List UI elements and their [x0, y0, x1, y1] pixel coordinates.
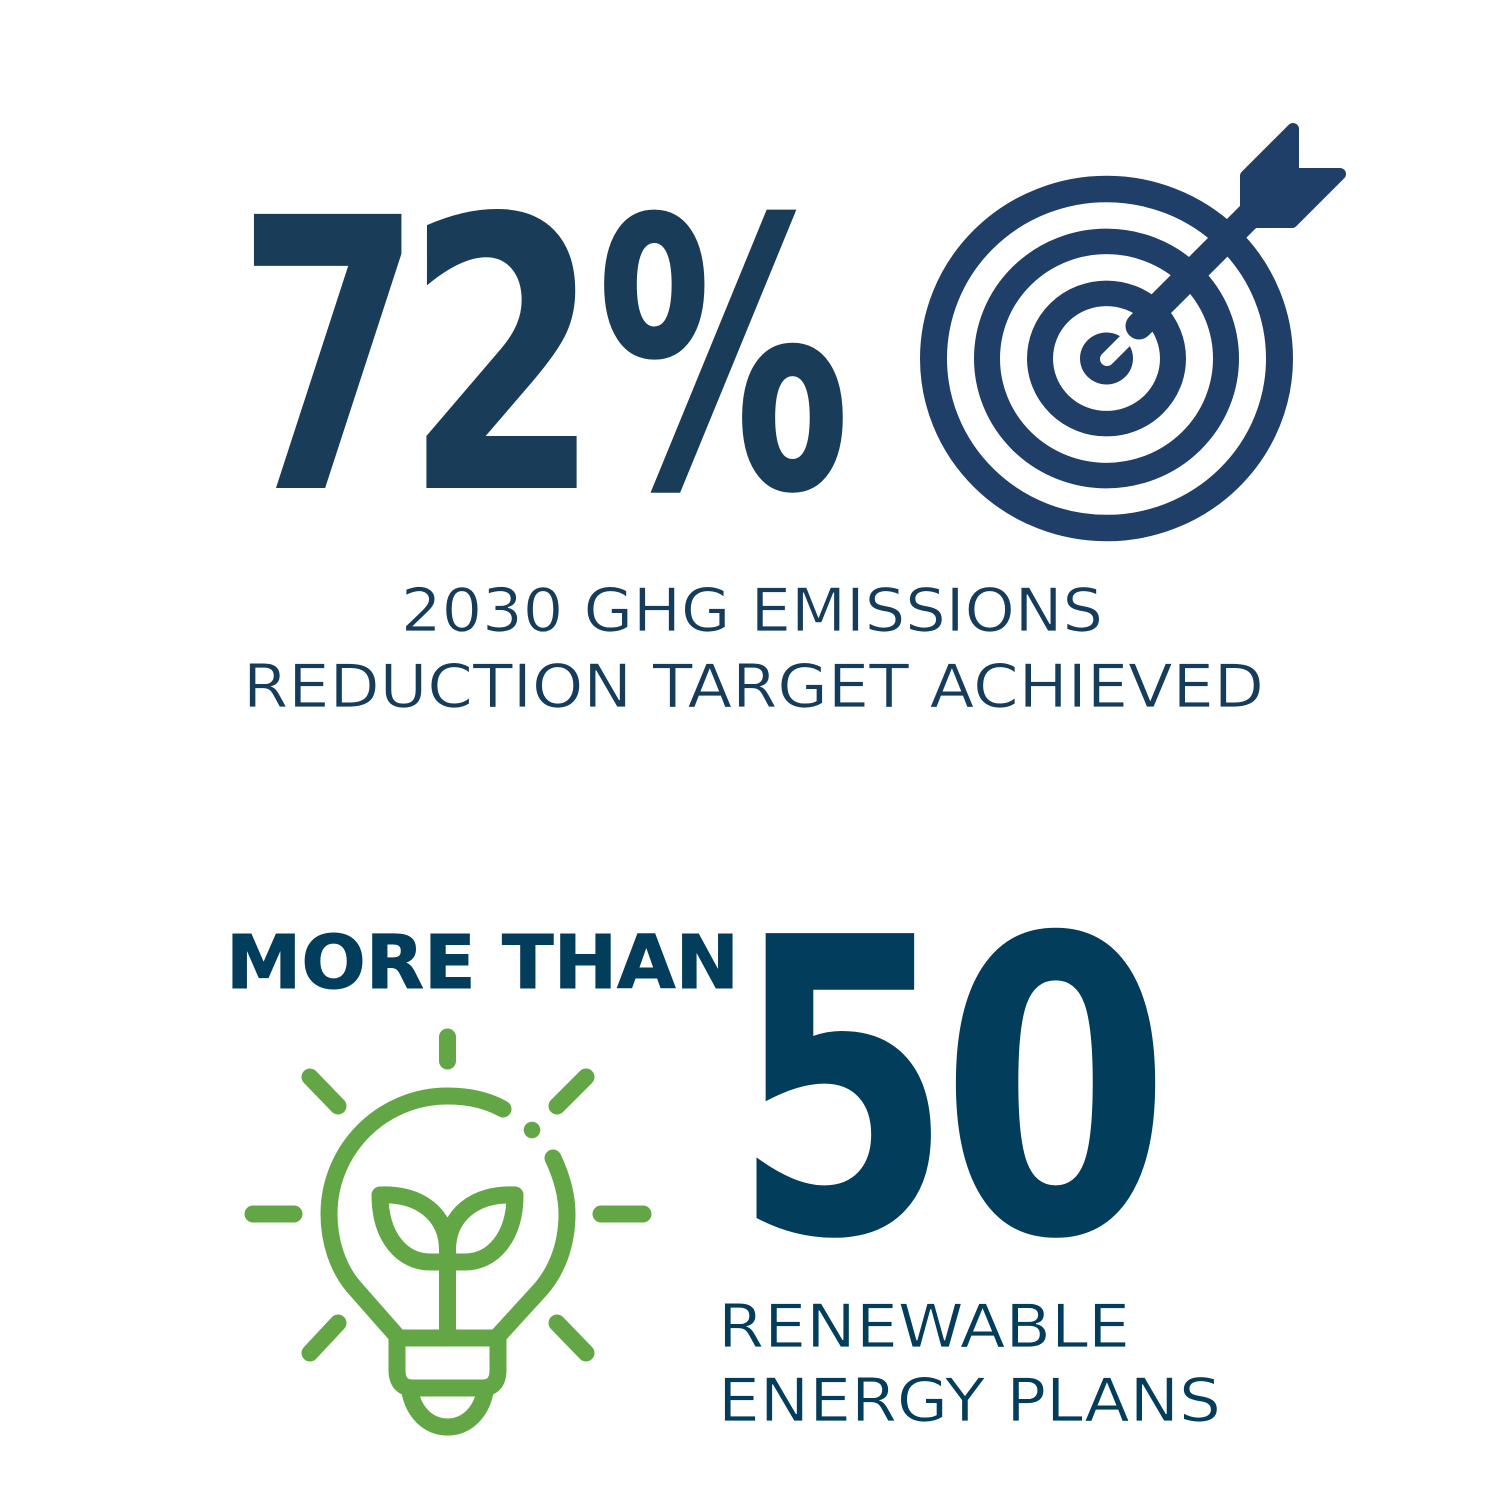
stat: 50: 5	[732, 852, 953, 1329]
caption: renewable energy plans: ENERGY PLANS	[718, 1366, 1221, 1436]
stat: 72 percent: %	[597, 142, 850, 574]
stat: 72 percent: 2	[404, 139, 601, 577]
icon: target with arrow	[934, 129, 1340, 528]
stat: 72 percent	[236, 139, 850, 578]
icon: light bulb with sprout	[253, 1037, 643, 1427]
caption: GHG target: REDUCTION TARGET ACHIEVED	[243, 652, 1264, 722]
heading: more than: MORE THAN	[226, 920, 739, 1006]
stat: 72 percent: 7	[236, 140, 423, 578]
caption: renewable energy plans: RENEWABLE	[718, 1292, 1130, 1362]
stat: 50	[732, 852, 1171, 1329]
caption: GHG target: 2030 GHG EMISSIONS	[401, 576, 1103, 646]
caption: GHG target	[243, 576, 1264, 722]
caption: renewable energy plans	[718, 1292, 1221, 1436]
stat: 50: 0	[940, 852, 1171, 1329]
